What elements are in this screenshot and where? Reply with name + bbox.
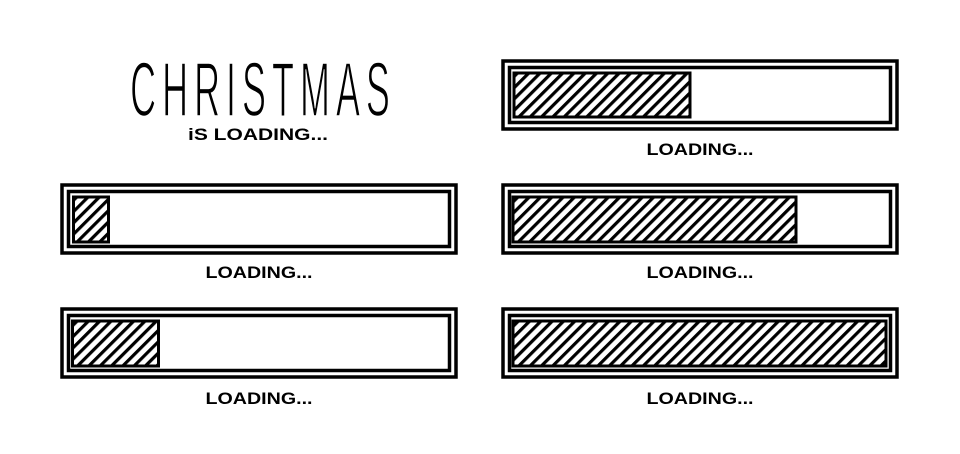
progress bar: left 1 (10%) <box>62 185 456 282</box>
progress bar: right 2 (75%) <box>503 185 897 282</box>
label: LOADING... <box>646 263 754 282</box>
title: CHRISTMAS <box>130 47 390 133</box>
label: LOADING... <box>206 263 312 282</box>
progress bar: left 2 (25%) <box>62 309 456 408</box>
progress bar: right 3 (100%) <box>503 309 897 408</box>
label: LOADING... <box>206 389 312 408</box>
progress bar: right 1 (47%) <box>503 61 897 159</box>
label: LOADING... <box>646 140 754 159</box>
subtitle: iS LOADING... <box>188 125 328 144</box>
label: LOADING... <box>646 389 754 408</box>
